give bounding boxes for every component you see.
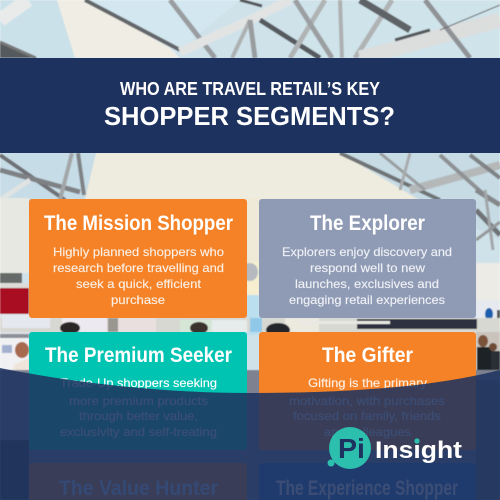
steel beams top bbox=[0, 0, 500, 58]
title banner bbox=[0, 58, 500, 153]
panel: The Explorer: Explorers enjoy discovery and bbox=[282, 245, 452, 259]
logo: Pi Insight bbox=[328, 427, 462, 469]
panel: The Gifter: Gifting is the primary bbox=[308, 376, 427, 390]
panel: The Mission Shopper: The Mission Shopper bbox=[44, 212, 233, 235]
panel: The Value Hunter bbox=[29, 463, 247, 500]
title line 1: WHO ARE TRAVEL RETAIL’S KEY bbox=[120, 79, 380, 99]
panel: The Premium Seeker: through better value, bbox=[79, 409, 198, 423]
gap between columns bbox=[247, 198, 259, 333]
panel: The Mission Shopper: Highly planned shoppers who bbox=[53, 245, 224, 259]
row between cards bbox=[0, 318, 500, 332]
panel: The Experience Shopper bbox=[259, 463, 476, 500]
panel: The Premium Seeker bbox=[29, 332, 247, 450]
panel: The Explorer: The Explorer bbox=[310, 212, 425, 235]
panel: The Premium Seeker: more premium products bbox=[69, 394, 208, 408]
panel: The Mission Shopper: research before travelling and bbox=[53, 261, 224, 275]
panel: The Gifter bbox=[259, 332, 476, 450]
mid section below banner bbox=[0, 153, 500, 213]
title line 2: SHOPPER SEGMENTS? bbox=[104, 101, 395, 131]
panel: The Premium Seeker: The Premium Seeker bbox=[45, 344, 232, 367]
panel: The Gifter: and colleagues bbox=[324, 425, 411, 439]
white sail top bbox=[57, 0, 180, 58]
panel: The Mission Shopper bbox=[29, 199, 247, 318]
panel: The Gifter: motivation, with purchases bbox=[289, 394, 445, 408]
panel: The Explorer: launches, exclusives and bbox=[295, 277, 439, 291]
panel: The Premium Seeker: exclusivity and self-treating bbox=[60, 425, 217, 439]
panel: The Explorer: engaging retail experiences bbox=[289, 293, 445, 307]
panel: The Mission Shopper: seek a quick, efficient bbox=[76, 277, 202, 291]
panel: The Gifter: focused on family, friends bbox=[293, 409, 441, 423]
person in dark uniform bbox=[477, 335, 500, 377]
logo badge: Pi bbox=[338, 433, 365, 464]
left ceiling and store front bbox=[0, 198, 29, 273]
logo dot bbox=[414, 438, 420, 444]
panel: The Gifter: The Gifter bbox=[322, 344, 413, 367]
panel: The Premium Seeker: Trade-Up shoppers seeking bbox=[60, 376, 217, 390]
panel: The Value Hunter: The Value Hunter bbox=[59, 477, 218, 500]
panel: The Explorer bbox=[259, 199, 476, 318]
logo wordmark: Insight bbox=[375, 437, 462, 464]
panel: The Explorer: respond well to new bbox=[310, 261, 425, 275]
right strip bbox=[476, 263, 500, 308]
curved navy overlay bbox=[0, 368, 500, 500]
skylight panes top bbox=[0, 0, 500, 58]
panel: The Mission Shopper: purchase bbox=[111, 293, 165, 307]
